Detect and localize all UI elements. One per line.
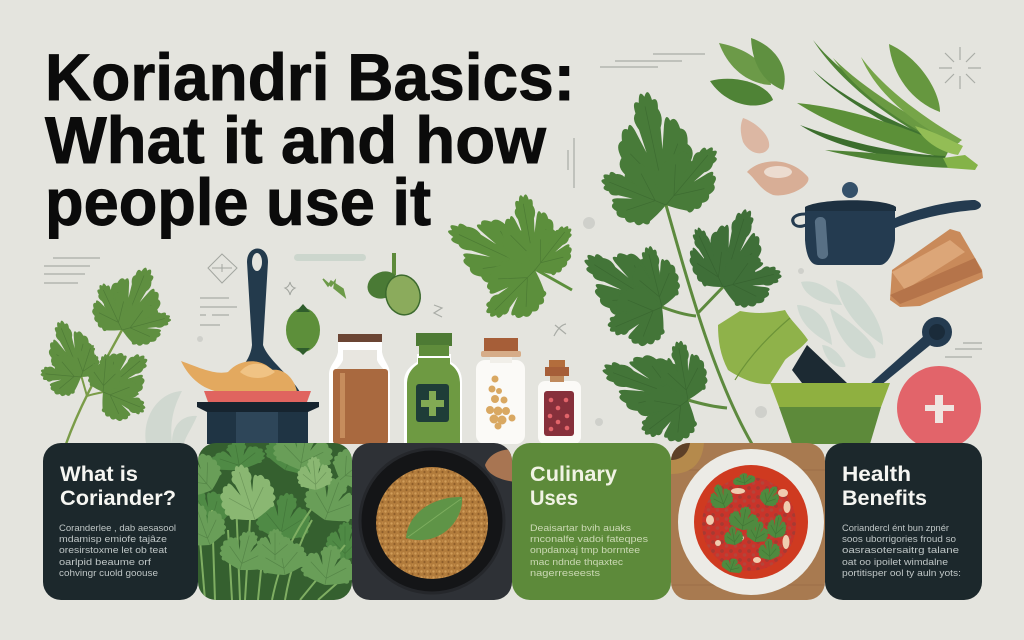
heading: what is coriander bbox=[60, 463, 176, 510]
text block: culinary description: nagerreseests bbox=[530, 567, 600, 578]
text block: health description: soos uborrigories froud so bbox=[842, 533, 956, 544]
heading: culinary uses: Culinary bbox=[530, 463, 617, 486]
icon: green fruit bbox=[286, 304, 320, 355]
heading: health benefits bbox=[842, 463, 927, 510]
title: Koriandri Basics: bbox=[45, 40, 575, 114]
text block: culinary description: mac ndnde thqaxtec bbox=[530, 556, 623, 567]
heading: what is coriander: Coriander? bbox=[60, 487, 176, 510]
title: people use it bbox=[45, 165, 431, 239]
text block: health description: oat oo ipoilet wimdalne bbox=[842, 556, 948, 567]
icon: mortar and pestle bbox=[718, 310, 952, 444]
text block: health description bbox=[842, 522, 961, 578]
text block: health description: portitisper ool ty auln yots: bbox=[842, 567, 961, 578]
icon: faint background leaves, left bbox=[145, 391, 197, 443]
text block: health description: oasrasotersaitrg talane bbox=[842, 544, 959, 555]
heading: what is coriander: What is bbox=[60, 463, 138, 486]
heading: culinary uses bbox=[530, 463, 617, 510]
pale pill bbox=[294, 254, 366, 261]
photo: tomato soup bowl bbox=[671, 443, 825, 600]
text block: coriander description: mdamisp emiofe tajâze bbox=[59, 533, 167, 544]
icon: coriander sprig, left bbox=[38, 258, 176, 444]
icon: green bottle bbox=[404, 333, 462, 444]
icon: red bottle bbox=[538, 360, 581, 444]
icon: large coriander plant bbox=[569, 86, 787, 457]
decorative line marks bbox=[44, 47, 982, 357]
icon: red plus circle bbox=[897, 366, 981, 450]
decorative dots bbox=[197, 217, 804, 426]
icon: fruit pair bbox=[363, 253, 425, 319]
icon: spring onion bundle bbox=[797, 40, 978, 170]
heading: health benefits: Health bbox=[842, 463, 911, 486]
panel: what is coriander bbox=[43, 443, 198, 600]
icon: coriander leaf, centre bbox=[435, 190, 586, 337]
icon: top leaves bbox=[710, 38, 785, 106]
text block: coriander description: oarlpid beaume orf bbox=[59, 556, 151, 567]
heading: health benefits: Benefits bbox=[842, 487, 927, 510]
photo: coriander seeds in pan bbox=[352, 443, 515, 600]
text block: culinary description: rnconalfe vadoi fateqpes bbox=[530, 533, 648, 544]
text block: coriander description: cohvingr cuold goouse bbox=[59, 567, 158, 578]
title bbox=[45, 40, 575, 239]
icon: garlic cloves bbox=[741, 118, 808, 195]
title: What it and how bbox=[45, 103, 547, 177]
text block: coriander description: oresirstoxme let ob teat bbox=[59, 544, 167, 555]
text block: culinary description bbox=[530, 522, 648, 578]
text block: coriander description: Coranderlee , dab aesasool bbox=[59, 522, 176, 533]
text block: culinary description: Deaisartar bvih auaks bbox=[530, 522, 631, 533]
icon: saucepan bbox=[793, 182, 981, 265]
icon: brown jar bbox=[329, 334, 390, 444]
text block: coriander description bbox=[59, 522, 176, 578]
icon: wood pieces bbox=[890, 229, 983, 307]
photo: fresh coriander bbox=[198, 443, 352, 600]
heading: culinary uses: Uses bbox=[530, 487, 578, 510]
panel: health benefits bbox=[825, 443, 982, 600]
icon: small sprig bbox=[323, 279, 345, 297]
panel: culinary uses bbox=[512, 443, 671, 600]
icon: faint leaves, right bbox=[797, 280, 883, 367]
icon: diamond and sparkle bbox=[208, 254, 295, 295]
icon: seed bottle bbox=[476, 338, 525, 444]
text block: culinary description: onpdanxaj tmp borrntee bbox=[530, 544, 640, 555]
text block: health description: Coriandercl ént bun zpnér bbox=[842, 522, 949, 533]
icon: pot with ladle bbox=[181, 248, 319, 444]
